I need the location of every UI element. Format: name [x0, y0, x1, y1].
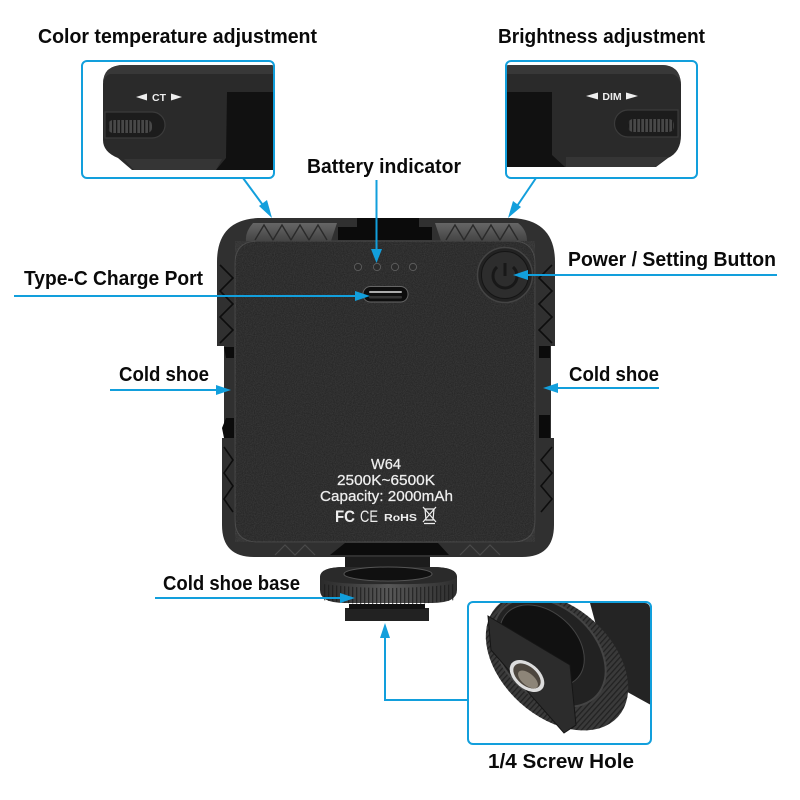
certification marks: FC	[335, 507, 355, 526]
label: brightness: Brightness adjustment	[498, 26, 705, 48]
label: color temperature: Color temperature adjustment	[38, 26, 317, 48]
arrow: type-C port	[14, 291, 370, 301]
spec text: W64	[371, 457, 401, 473]
certification marks: CE	[360, 507, 378, 526]
label: screw hole: 1/4 Screw Hole	[488, 751, 634, 773]
threaded hole	[510, 660, 544, 692]
label: cold shoe base: Cold shoe base	[163, 573, 300, 595]
arrow: power button	[513, 270, 777, 280]
foot plate	[345, 608, 429, 621]
zigzag patterns	[220, 225, 552, 555]
certification marks: RoHS	[384, 512, 417, 524]
arrow: battery indicator	[371, 180, 382, 263]
bottom dark wedge	[330, 543, 449, 555]
inset: color temperature wheel: CT	[152, 92, 167, 104]
knurled ring	[320, 567, 457, 603]
label: type-C: Type-C Charge Port	[24, 268, 203, 290]
label: right cold shoe: Cold shoe	[569, 364, 659, 386]
back plate	[235, 241, 535, 542]
arrow: color temperature	[243, 178, 272, 218]
top grip band right	[435, 223, 527, 241]
label: power button: Power / Setting Button	[568, 249, 776, 271]
arrow: left cold shoe	[110, 385, 231, 395]
background dark light body	[590, 603, 651, 705]
type-C port	[363, 286, 408, 302]
power button	[478, 248, 532, 302]
battery LEDs	[354, 263, 417, 271]
product: cold shoe base	[320, 557, 457, 621]
knurled ring	[486, 603, 628, 730]
right cold shoe slot	[539, 346, 550, 438]
arrow: right cold shoe	[543, 383, 659, 393]
inset: brightness wheel	[506, 61, 697, 178]
arrow: brightness	[508, 178, 536, 218]
spec text	[320, 457, 453, 505]
inset: 1/4 screw hole	[467, 601, 652, 745]
label: battery indicator: Battery indicator	[307, 156, 461, 178]
inset: color temperature wheel	[82, 61, 274, 178]
neck	[345, 557, 430, 570]
arrow: screw hole	[380, 623, 468, 700]
cold shoe slot top	[338, 218, 432, 240]
body frame	[217, 218, 555, 557]
label: left cold shoe: Cold shoe	[119, 364, 209, 386]
left cold shoe slot	[222, 347, 234, 438]
certification marks	[335, 507, 436, 526]
arrow: cold shoe base	[155, 593, 355, 603]
top grip band left	[246, 223, 337, 241]
product: light body	[217, 218, 555, 557]
spec text: Capacity: 2000mAh	[320, 489, 453, 505]
spec text: 2500K~6500K	[337, 473, 435, 489]
plate	[488, 616, 576, 733]
plate texture	[235, 241, 535, 542]
inset: brightness wheel: DIM	[602, 91, 622, 103]
